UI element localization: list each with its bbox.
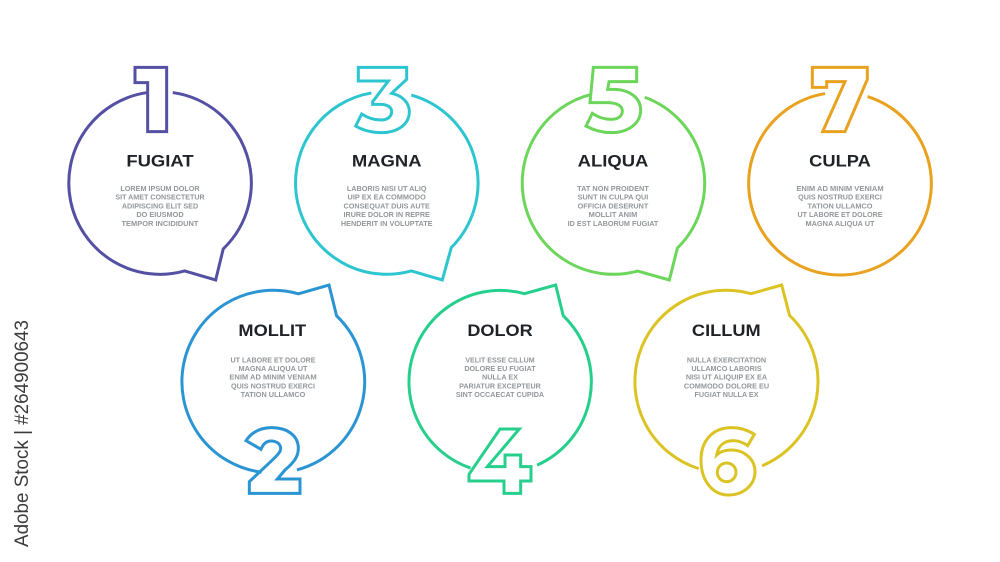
body text: dolor: NULLA EX bbox=[482, 375, 518, 382]
heading: aliqua: ALIQUA bbox=[578, 152, 648, 170]
body text: fugiat: LOREM IPSUM DOLOR bbox=[120, 186, 200, 193]
body text: magna: HENDERIT IN VOLUPTATE bbox=[341, 221, 433, 228]
body text: aliqua bbox=[568, 186, 659, 228]
number 5 bbox=[586, 67, 641, 133]
body text: mollit bbox=[229, 357, 317, 399]
panel: step 1 fugiat bbox=[69, 67, 251, 280]
body text: cillum bbox=[684, 357, 769, 399]
heading: mollit: MOLLIT bbox=[238, 321, 307, 340]
panel: step 4 dolor bbox=[409, 285, 591, 493]
panel: step 7 culpa bbox=[749, 67, 931, 275]
bubble outline 2 bbox=[182, 285, 365, 472]
body text: dolor: PARIATUR EXCEPTEUR bbox=[459, 383, 541, 390]
side credit text: Adobe Stock | #264900643 bbox=[12, 320, 33, 547]
body text: dolor: VELIT ESSE CILLUM bbox=[465, 357, 535, 364]
panel: step 3 magna bbox=[296, 67, 478, 280]
number 1 bbox=[135, 67, 167, 132]
body text: cillum: NULLA EXERCITATION bbox=[687, 357, 766, 364]
bubble outline 6 bbox=[635, 285, 818, 469]
body text: aliqua: SUNT IN CULPA QUI bbox=[578, 195, 648, 202]
number 4 bbox=[469, 429, 531, 493]
body text: culpa: UT LABORE ET DOLORE bbox=[798, 212, 883, 219]
panel: step 6 cillum bbox=[635, 285, 818, 495]
body text: culpa: QUIS NOSTRUD EXERCI bbox=[798, 195, 882, 202]
body text: magna bbox=[341, 186, 433, 228]
panel: step 5 aliqua bbox=[522, 67, 705, 280]
body text: culpa: ENIM AD MINIM VENIAM bbox=[796, 186, 884, 193]
number 7 bbox=[812, 67, 867, 132]
bubble outline 3 bbox=[296, 93, 478, 280]
body text: magna: CONSEQUAT DUIS AUTE bbox=[344, 203, 430, 210]
heading: cillum: CILLUM bbox=[692, 321, 761, 340]
body text: aliqua: OFFICIA DESERUNT bbox=[578, 203, 649, 210]
body text: dolor bbox=[456, 357, 544, 399]
number 6 bbox=[701, 428, 755, 495]
body text: fugiat bbox=[115, 186, 205, 228]
heading: fugiat: FUGIAT bbox=[126, 152, 194, 170]
body text: mollit: UT LABORE ET DOLORE bbox=[230, 357, 316, 364]
body text: dolor: DOLORE EU FUGIAT bbox=[464, 366, 536, 373]
body text: cillum: ULLAMCO LABORIS bbox=[691, 366, 762, 373]
body text: fugiat: ADIPISCING ELIT SED bbox=[122, 203, 198, 210]
bubble outline 7 bbox=[749, 94, 931, 275]
body text: cillum: COMMODO DOLORE EU bbox=[684, 383, 769, 390]
body text: dolor: SINT OCCAECAT CUPIDA bbox=[456, 392, 544, 399]
heading: magna: MAGNA bbox=[352, 152, 422, 170]
body text: cillum: NISI UT ALIQUIP EX EA bbox=[686, 375, 767, 382]
body text: cillum: FUGIAT NULLA EX bbox=[694, 392, 759, 399]
number 3 bbox=[356, 67, 409, 133]
bubble outline 4 bbox=[409, 285, 591, 468]
body text: aliqua: ID EST LABORUM FUGIAT bbox=[568, 221, 659, 228]
body text: fugiat: SIT AMET CONSECTETUR bbox=[115, 195, 205, 202]
panel: step 2 mollit bbox=[182, 285, 365, 493]
body text: mollit: TATION ULLAMCO bbox=[241, 392, 306, 399]
number 2 bbox=[246, 428, 300, 493]
heading: culpa: CULPA bbox=[809, 152, 871, 170]
body text: fugiat: TEMPOR INCIDIDUNT bbox=[122, 221, 199, 228]
body text: magna: IRURE DOLOR IN REPRE bbox=[344, 212, 430, 219]
body text: mollit: QUIS NOSTRUD EXERCI bbox=[231, 383, 315, 390]
body text: culpa: TATION ULLAMCO bbox=[808, 203, 873, 210]
heading: dolor: DOLOR bbox=[467, 321, 533, 340]
body text: culpa: MAGNA ALIQUA UT bbox=[806, 221, 875, 228]
body text: magna: LABORIS NISI UT ALIQ bbox=[347, 186, 427, 193]
body text: aliqua: MOLLIT ANIM bbox=[589, 212, 638, 219]
body text: mollit: MAGNA ALIQUA UT bbox=[238, 366, 308, 373]
body text: mollit: ENIM AD MINIM VENIAM bbox=[229, 375, 317, 382]
body text: fugiat: DO EIUSMOD bbox=[136, 212, 184, 219]
body text: magna: UIP EX EA COMMODO bbox=[348, 195, 426, 202]
bubble outline 1 bbox=[69, 92, 251, 280]
body text: culpa bbox=[796, 186, 884, 228]
bubble outline 5 bbox=[522, 94, 705, 280]
body text: aliqua: TAT NON PROIDENT bbox=[577, 186, 650, 193]
